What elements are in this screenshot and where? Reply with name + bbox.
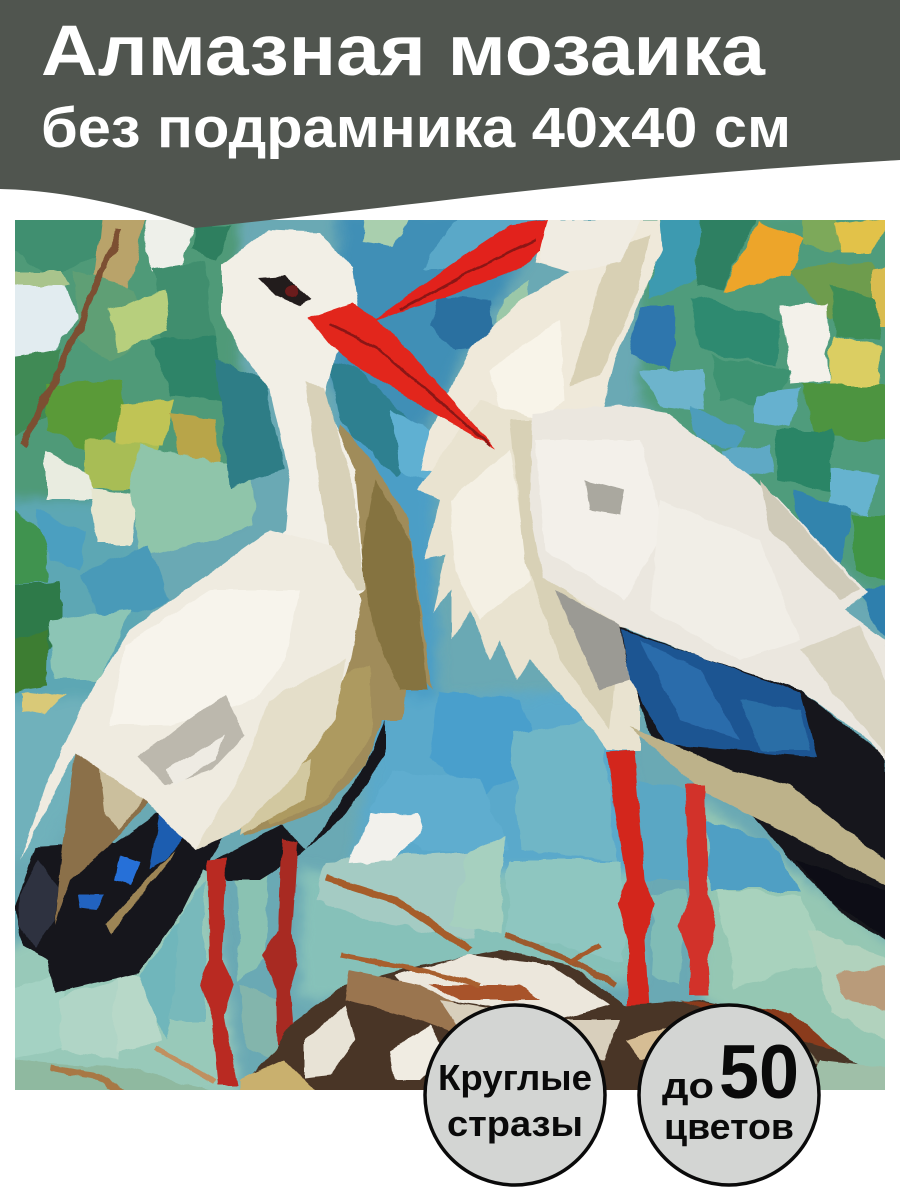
painting: two storks at a nest (0, 210, 900, 1100)
left legs (200, 858, 238, 1085)
right stork (372, 220, 895, 1025)
dark tail feathers (15, 743, 250, 993)
left stork (15, 230, 432, 1085)
left stork beak (308, 303, 496, 449)
badge: up to 50 colours: до (662, 1065, 714, 1106)
right legs (606, 750, 655, 1025)
right stork beak (372, 220, 548, 322)
far-side olive feathers (240, 424, 433, 836)
badge: round rhinestones (425, 1005, 605, 1185)
left foliage strokes (15, 220, 102, 272)
badge: round rhinestones: стразы (447, 1103, 583, 1144)
title: Алмазная мозаика (41, 12, 766, 91)
painted background patches (0, 210, 900, 1100)
centre sky strokes (362, 220, 408, 247)
hanging pale feathers (417, 400, 640, 750)
badge: round rhinestones: Круглые (438, 1057, 592, 1098)
badge: up to 50 colours: 50 (719, 1030, 799, 1115)
top-right foliage strokes (650, 215, 700, 300)
lower-left teal strokes (15, 976, 65, 1058)
neck and head (222, 230, 365, 610)
white wing and breast (20, 530, 362, 860)
dark wing and tail (615, 625, 895, 945)
badge: up to 50 colours (639, 1005, 819, 1185)
subtitle: без подрамника 40х40 см (41, 96, 791, 160)
header banner (0, 0, 900, 228)
head and neck (420, 220, 662, 480)
eye marking (258, 276, 312, 306)
badge: up to 50 colours: цветов (664, 1106, 794, 1147)
nest with twigs and eggs (155, 878, 895, 1095)
white body feathers (530, 405, 895, 770)
